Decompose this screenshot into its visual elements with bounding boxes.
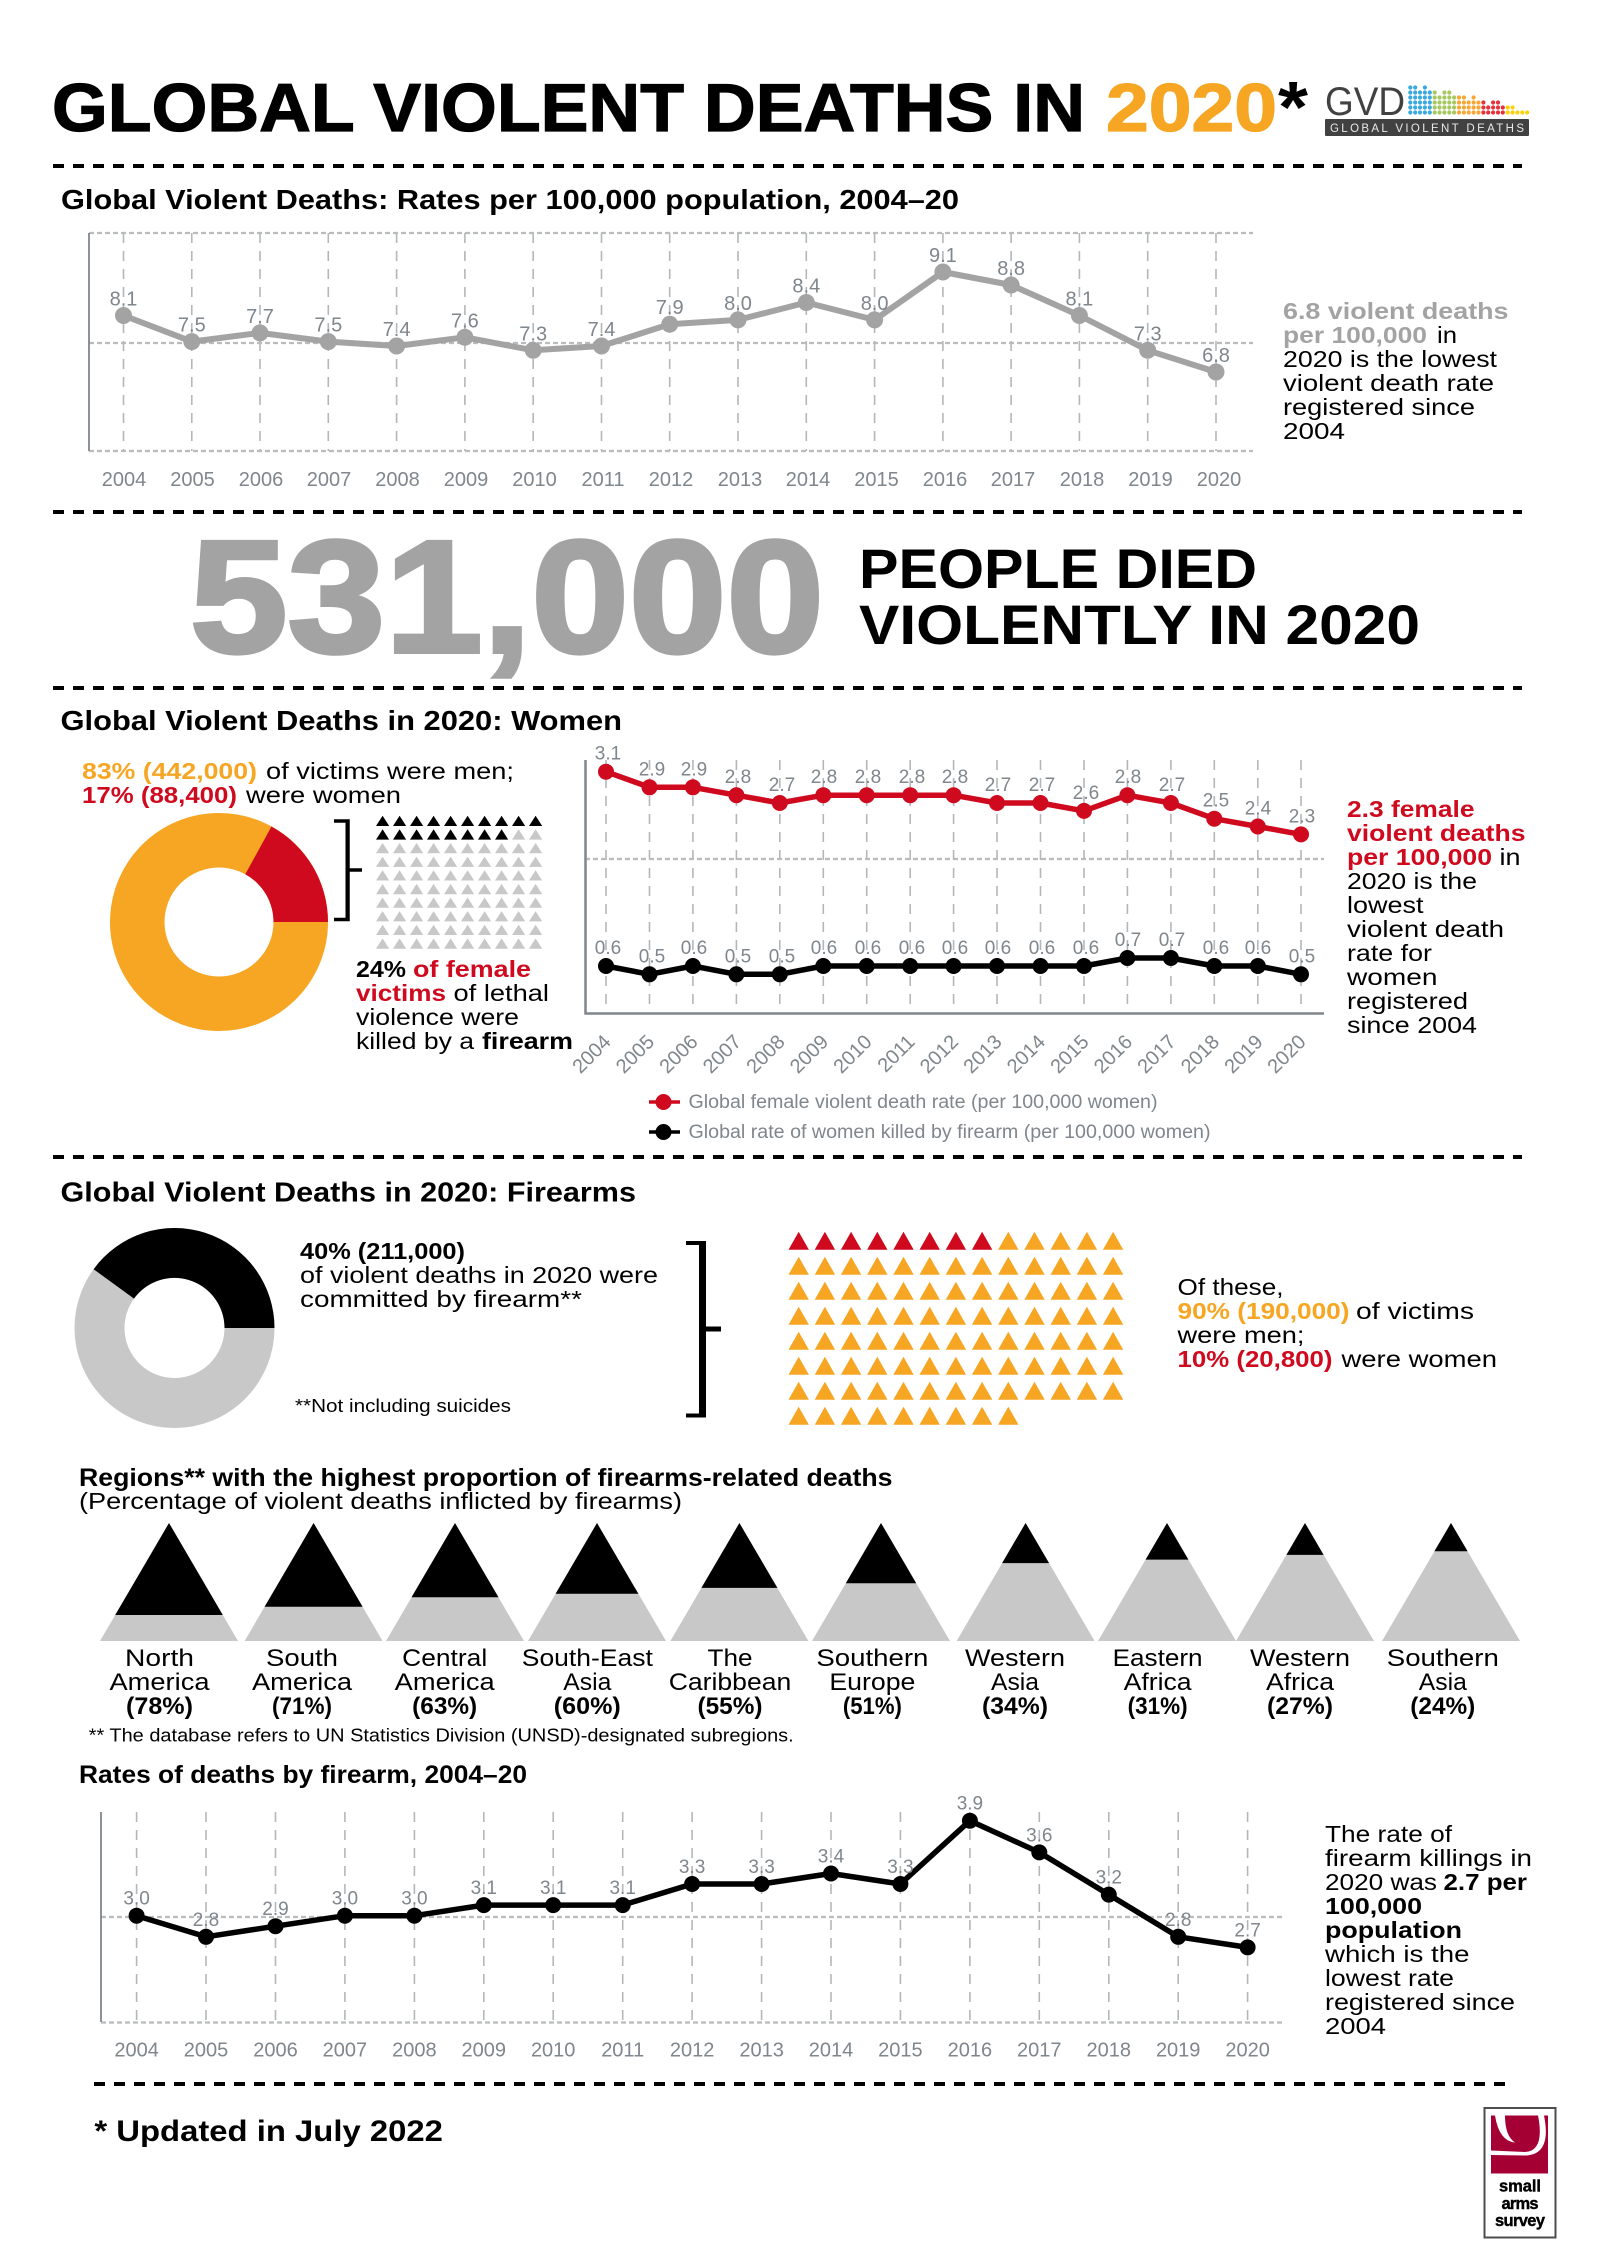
value labels [110, 245, 1230, 367]
South-East Asia: (60%) [554, 1693, 621, 1720]
donut chart: deaths by firearm [94, 1228, 274, 1403]
logo: GVD Global Violent Deaths: GVD [1325, 80, 1405, 124]
data line [124, 272, 1216, 372]
rotated year labels: 2020 [1264, 1031, 1311, 1078]
logo: Small Arms Survey: small [1499, 2178, 1541, 2196]
value labels: firearm rate: 0.6 [1073, 938, 1099, 959]
South-East Asia: South-East [522, 1645, 653, 1672]
text: people died violently in 2020 [859, 537, 1420, 656]
year axis labels: 2005 [184, 2040, 228, 2062]
text: of these [1176, 1274, 1497, 1372]
value labels: firearm rate [595, 930, 1315, 967]
Western Africa: Africa [1266, 1669, 1335, 1696]
value labels: female rate: 2.3 [1289, 806, 1315, 827]
heading: firearms: Global Violent Deaths in 2020: Firearms [60, 1176, 636, 1208]
value labels: firearm rate: 0.5 [725, 946, 751, 967]
text block: 6.8 violent deaths: 2004 [1283, 418, 1345, 444]
year axis labels: 2020 [1225, 2040, 1270, 2062]
text: of these: 90% (190,000) [1178, 1298, 1350, 1324]
year axis labels: 2014 [809, 2040, 853, 2062]
value labels: 3.1 [540, 1878, 566, 1899]
footnote: not including suicides: **Not including suicides [295, 1396, 511, 1416]
value labels: 7.3 [1134, 323, 1162, 345]
year axis labels: 2007 [323, 2040, 367, 2062]
text block: 6.8 violent deaths: in [1437, 322, 1457, 348]
text: 24% of female victims: of female [413, 956, 531, 982]
value labels: female rate: 2.7 [985, 775, 1011, 796]
heading: regions: (Percentage of violent deaths inflicted by firearms) [79, 1488, 682, 1514]
text block: 2.3 female violent deaths: rate for [1347, 940, 1432, 966]
value labels: 7.7 [246, 306, 274, 328]
text: 24% of female victims: 24% [356, 956, 406, 982]
value labels: firearm rate: 0.6 [681, 938, 707, 959]
text: victims by sex: were women [245, 782, 401, 808]
text block: rate of firearm killings: 2.7 per [1444, 1869, 1527, 1895]
value labels: firearm rate: 0.6 [1029, 938, 1055, 959]
Western Africa [1236, 1523, 1374, 1720]
text: 40% by firearm: committed by firearm** [300, 1286, 582, 1312]
year axis labels: 2011 [581, 469, 625, 491]
value labels: female rate: 2.7 [1159, 775, 1185, 796]
The Caribbean: The [708, 1645, 752, 1672]
South America [245, 1523, 383, 1720]
value labels: female rate [595, 744, 1315, 827]
rotated year labels: 2007 [699, 1031, 746, 1078]
value labels: 7.5 [178, 315, 206, 337]
year axis labels [114, 2040, 1270, 2062]
Central America: America [395, 1669, 495, 1696]
text block: rate of firearm killings: 2004 [1325, 2013, 1386, 2039]
year axis labels [102, 469, 1241, 491]
value labels: firearm rate: 0.6 [1203, 938, 1229, 959]
value labels: 8.4 [792, 276, 820, 298]
text: of these: 10% (20,800) [1178, 1346, 1332, 1372]
value labels: 2.8 [193, 1910, 219, 1931]
value labels: 2.7 [1234, 1920, 1261, 1941]
black line: firearm rate [598, 950, 1309, 982]
value labels: 7.4 [588, 319, 615, 341]
text: people died violently in 2020: VIOLENTLY IN 2020 [859, 593, 1420, 656]
logo: Small Arms Survey [1484, 2108, 1556, 2238]
heading: regions: Regions** with the highest proportion of firearms-related deaths [79, 1464, 892, 1492]
South America: (71%) [272, 1693, 332, 1720]
text: of these: were men; [1176, 1322, 1304, 1348]
text block: 2.3 female violent deaths: 2.3 female [1347, 796, 1474, 822]
value labels: 8.1 [1065, 288, 1093, 310]
value labels: 3.6 [1026, 1825, 1053, 1846]
value labels: 3.4 [818, 1846, 845, 1868]
data line and points [129, 1813, 1256, 1955]
value labels: 3.3 [748, 1857, 775, 1878]
legend: Global rate of women killed by firearm (per 100,000 women) [688, 1122, 1210, 1143]
Central America: (63%) [412, 1693, 477, 1720]
year axis labels: 2008 [392, 2040, 437, 2062]
rotated year labels: 2009 [786, 1031, 833, 1078]
value labels: firearm rate: 0.6 [1245, 938, 1271, 959]
South America: South [266, 1645, 338, 1672]
heading: women: Global Violent Deaths in 2020: Women [60, 705, 622, 736]
text block: 6.8 violent deaths: 6.8 violent deaths [1283, 298, 1508, 324]
line chart: global violent death rates [89, 233, 1253, 491]
bracket [334, 821, 362, 920]
text block: 2.3 female violent deaths: per 100,000 [1347, 844, 1492, 870]
heading: regions [79, 1464, 892, 1514]
text block: rate of firearm killings [1324, 1821, 1532, 2039]
legend [649, 1092, 1210, 1143]
year axis labels: 2009 [444, 469, 488, 491]
value labels: 7.6 [451, 310, 479, 332]
footnote: UNSD subregions: ** The database refers to UN Statistics Division (UNSD)-designated subregions. [89, 1726, 794, 1746]
text block: rate of firearm killings: which is the [1324, 1941, 1470, 1967]
North America: North [125, 1645, 194, 1672]
value labels: female rate: 2.9 [639, 759, 665, 780]
Eastern Africa: (31%) [1128, 1693, 1188, 1720]
value labels: 8.0 [724, 293, 752, 315]
Eastern Africa: Eastern [1113, 1645, 1203, 1672]
text: 24% of female victims: of lethal [454, 980, 549, 1006]
text block: rate of firearm killings: registered since [1325, 1989, 1515, 2015]
year axis labels: 2014 [786, 469, 830, 491]
value labels: firearm rate: 0.7 [1115, 930, 1141, 951]
text block: 6.8 violent deaths: violent death rate [1283, 370, 1494, 396]
year axis labels: 2018 [1087, 2040, 1131, 2062]
value labels: 3.2 [1096, 1868, 1122, 1889]
value labels: female rate: 2.8 [942, 767, 968, 788]
Eastern Africa [1098, 1523, 1236, 1720]
rotated year labels: 2006 [656, 1031, 703, 1078]
Western Asia: Asia [991, 1669, 1040, 1696]
year axis labels: 2017 [1017, 2040, 1062, 2062]
year axis labels: 2015 [878, 2040, 923, 2062]
year axis labels: 2011 [601, 2040, 644, 2062]
year axis labels: 2016 [923, 469, 967, 491]
red line: female rate [598, 764, 1309, 842]
rotated year labels: 2017 [1134, 1031, 1181, 1078]
value labels: 8.0 [861, 293, 889, 315]
rotated year labels: 2008 [743, 1031, 790, 1078]
value labels: female rate: 3.1 [595, 744, 621, 765]
text: 24% of female victims: firearm [482, 1028, 573, 1054]
North America [100, 1523, 238, 1720]
year axis labels: 2020 [1197, 469, 1241, 491]
year axis labels: 2009 [462, 2040, 506, 2062]
heading: rates of deaths by firearm: Rates of deaths by firearm, 2004–20 [79, 1761, 527, 1789]
pictogram: firearm victims by sex [788, 1232, 1123, 1425]
text: of these: of victims [1356, 1298, 1474, 1324]
heading: rates per 100,000: Global Violent Deaths: Rates per 100,000 population, 2004–20 [61, 184, 959, 215]
text block: 2.3 female violent deaths [1346, 796, 1526, 1038]
logo: Small Arms Survey: arms [1502, 2195, 1538, 2213]
triangle chart: regions [100, 1523, 1520, 1720]
Southern Europe: Southern [816, 1645, 928, 1672]
rotated year labels: 2016 [1090, 1031, 1137, 1078]
year axis labels: 2005 [170, 469, 215, 491]
text: 24% of female victims [356, 956, 573, 1054]
text block: rate of firearm killings: The rate of [1325, 1821, 1453, 1847]
Western Africa: (27%) [1267, 1693, 1333, 1720]
The Caribbean [669, 1523, 808, 1720]
North America: America [110, 1669, 210, 1696]
text block: 2.3 female violent deaths: 2020 is the [1347, 868, 1477, 894]
rotated year labels: 2005 [612, 1031, 659, 1078]
value labels: firearm rate: 0.6 [595, 938, 621, 959]
text block: rate of firearm killings: population [1325, 1917, 1462, 1943]
text: people died violently in 2020: PEOPLE DIED [859, 537, 1257, 600]
rotated year labels: 2014 [1003, 1031, 1050, 1078]
value labels: 3.1 [609, 1878, 636, 1899]
Southern Asia: Asia [1419, 1669, 1467, 1696]
donut chart: men and women victims [137, 826, 328, 1004]
year axis labels: 2010 [531, 2040, 575, 2062]
value labels: female rate: 2.7 [769, 775, 795, 796]
value labels: female rate: 2.5 [1203, 791, 1229, 812]
rotated year labels: 2013 [960, 1031, 1007, 1078]
year axis labels: 2010 [512, 469, 557, 491]
logo: GVD Global Violent Deaths [1325, 80, 1529, 136]
value labels: firearm rate: 0.5 [639, 946, 665, 967]
rotated year labels: 2019 [1221, 1031, 1268, 1078]
logo: GVD Global Violent Deaths: GLOBAL VIOLENT DEATHS [1330, 123, 1524, 135]
year axis labels: 2012 [649, 469, 693, 491]
text: 24% of female victims: violence were [356, 1004, 519, 1030]
value labels: 8.8 [997, 258, 1025, 280]
text: 40% by firearm: 40% (211,000) [300, 1238, 465, 1264]
text block: 6.8 violent deaths: registered since [1283, 394, 1475, 420]
rotated year labels: 2004 [569, 1031, 616, 1078]
legend: Global female violent death rate (per 100,000 women) [688, 1092, 1158, 1113]
value labels: 3.3 [887, 1857, 914, 1878]
line chart: firearm death rates [101, 1794, 1283, 2062]
year axis labels: 2013 [739, 2040, 784, 2062]
value labels: firearm rate: 0.6 [811, 938, 837, 959]
year axis labels: 2006 [253, 2040, 298, 2062]
text: victims by sex: of victims were men; [266, 758, 514, 784]
South-East Asia: Asia [563, 1669, 612, 1696]
Western Asia [957, 1523, 1095, 1720]
Southern Asia [1382, 1523, 1520, 1720]
value labels: 9.1 [929, 245, 957, 267]
value labels: female rate: 2.8 [855, 767, 881, 788]
The Caribbean: Caribbean [669, 1669, 791, 1696]
text block: 6.8 violent deaths [1283, 298, 1508, 444]
rotated year labels [569, 1031, 1311, 1078]
text block: 6.8 violent deaths: per 100,000 [1283, 322, 1427, 348]
year axis labels: 2012 [670, 2040, 714, 2062]
value labels: 3.0 [123, 1889, 150, 1910]
Southern Asia: Southern [1387, 1645, 1499, 1672]
text: 24% of female victims: victims [356, 980, 446, 1006]
value labels: firearm rate: 0.6 [942, 938, 968, 959]
text: 24% of female victims: killed by a [356, 1028, 475, 1054]
value labels: firearm rate: 0.7 [1159, 930, 1185, 951]
value labels: 6.8 [1202, 345, 1230, 367]
year axis labels: 2016 [948, 2040, 992, 2062]
value labels: 7.4 [383, 319, 411, 341]
value labels: firearm rate: 0.6 [899, 938, 925, 959]
text block: 2.3 female violent deaths: in [1500, 844, 1520, 870]
text block: 2.3 female violent deaths: women [1346, 964, 1438, 990]
line chart: female violent death rate and women killed by firearm [569, 744, 1324, 1078]
year axis labels: 2019 [1156, 2040, 1200, 2062]
Western Africa: Western [1250, 1645, 1350, 1672]
Southern Europe: (51%) [843, 1693, 902, 1720]
year axis labels: 2006 [239, 469, 283, 491]
value labels: female rate: 2.8 [725, 767, 751, 788]
text block: rate of firearm killings: 100,000 [1325, 1893, 1422, 1919]
Southern Asia: (24%) [1410, 1693, 1475, 1720]
value labels [123, 1794, 1261, 1941]
value labels: female rate: 2.4 [1245, 798, 1272, 820]
text block: rate of firearm killings: 2020 was [1325, 1869, 1437, 1895]
rotated year labels: 2015 [1047, 1031, 1094, 1078]
text: 40% by firearm [300, 1238, 658, 1312]
value labels: female rate: 2.9 [681, 759, 707, 780]
value labels: female rate: 2.8 [899, 767, 925, 788]
Southern Europe: Europe [829, 1669, 915, 1696]
value labels: 2.8 [1165, 1910, 1191, 1931]
Central America [386, 1523, 524, 1720]
value labels: 3.0 [401, 1889, 428, 1910]
year axis labels: 2007 [307, 469, 351, 491]
year axis labels: 2004 [102, 469, 146, 491]
logo: Small Arms Survey: survey [1495, 2212, 1546, 2230]
year axis labels: 2013 [718, 469, 762, 491]
title: 2020 [1106, 70, 1277, 146]
title: * [1278, 68, 1308, 148]
year axis labels: 2015 [854, 469, 899, 491]
value labels: 3.3 [679, 1857, 705, 1878]
value labels: 7.3 [519, 323, 547, 345]
Western Asia: Western [965, 1645, 1065, 1672]
text block: rate of firearm killings: firearm killings in [1325, 1845, 1532, 1871]
text: victims by sex [82, 758, 514, 808]
big number: 531,000: 531,000 [190, 507, 824, 686]
value labels: firearm rate: 0.5 [769, 946, 795, 967]
text block: 2.3 female violent deaths: registered [1347, 988, 1468, 1014]
text: victims by sex: 83% (442,000) [82, 758, 257, 784]
text block: rate of firearm killings: lowest rate [1325, 1965, 1454, 1991]
value labels: female rate: 2.8 [1115, 767, 1141, 788]
text block: 6.8 violent deaths: 2020 is the lowest [1283, 346, 1498, 372]
value labels: firearm rate: 0.6 [855, 938, 881, 959]
South America: America [252, 1669, 353, 1696]
rotated year labels: 2018 [1177, 1031, 1224, 1078]
text block: 2.3 female violent deaths: since 2004 [1347, 1012, 1477, 1038]
year axis labels: 2017 [991, 469, 1035, 491]
The Caribbean: (55%) [698, 1693, 762, 1720]
year axis labels: 2004 [114, 2040, 159, 2062]
value labels: 7.5 [314, 315, 342, 337]
text: victims by sex: 17% (88,400) [82, 782, 237, 808]
value labels: 8.1 [110, 288, 137, 310]
text: 40% by firearm: of violent deaths in 2020 were [300, 1262, 658, 1288]
South-East Asia [522, 1523, 666, 1720]
value labels: 3.9 [957, 1794, 983, 1815]
rotated year labels: 2012 [916, 1031, 963, 1078]
data points [115, 264, 1224, 380]
note: updated in July 2022: * Updated in July 2022 [94, 2115, 443, 2148]
text: of these: Of these, [1178, 1274, 1284, 1300]
pictogram: female victims by firearm [376, 816, 542, 949]
Southern Europe [812, 1523, 950, 1720]
bracket [686, 1241, 702, 1418]
value labels: 3.0 [332, 1889, 358, 1910]
North America: (78%) [126, 1693, 193, 1720]
value labels: female rate: 2.7 [1029, 775, 1055, 796]
Western Asia: (34%) [982, 1693, 1048, 1720]
rotated year labels: 2011 [874, 1031, 920, 1077]
value labels: 2.9 [262, 1899, 289, 1920]
rotated year labels: 2010 [830, 1031, 877, 1078]
text block: 2.3 female violent deaths: violent deaths [1347, 820, 1526, 846]
value labels: firearm rate: 0.5 [1289, 946, 1315, 967]
value labels: female rate: 2.6 [1073, 783, 1099, 804]
Eastern Africa: Africa [1124, 1669, 1192, 1696]
value labels: female rate: 2.8 [811, 767, 837, 788]
value labels: 3.1 [471, 1878, 497, 1899]
year axis labels: 2008 [375, 469, 420, 491]
value labels: firearm rate: 0.6 [985, 938, 1011, 959]
Central America: Central [402, 1645, 487, 1672]
text block: 2.3 female violent deaths: lowest [1347, 892, 1424, 918]
year axis labels: 2018 [1060, 469, 1104, 491]
text block: 2.3 female violent deaths: violent death [1347, 916, 1504, 942]
value labels: 7.9 [656, 297, 684, 319]
year axis labels: 2019 [1128, 469, 1173, 491]
text: of these: were women [1340, 1346, 1497, 1372]
title: GLOBAL VIOLENT DEATHS IN [52, 70, 1085, 146]
